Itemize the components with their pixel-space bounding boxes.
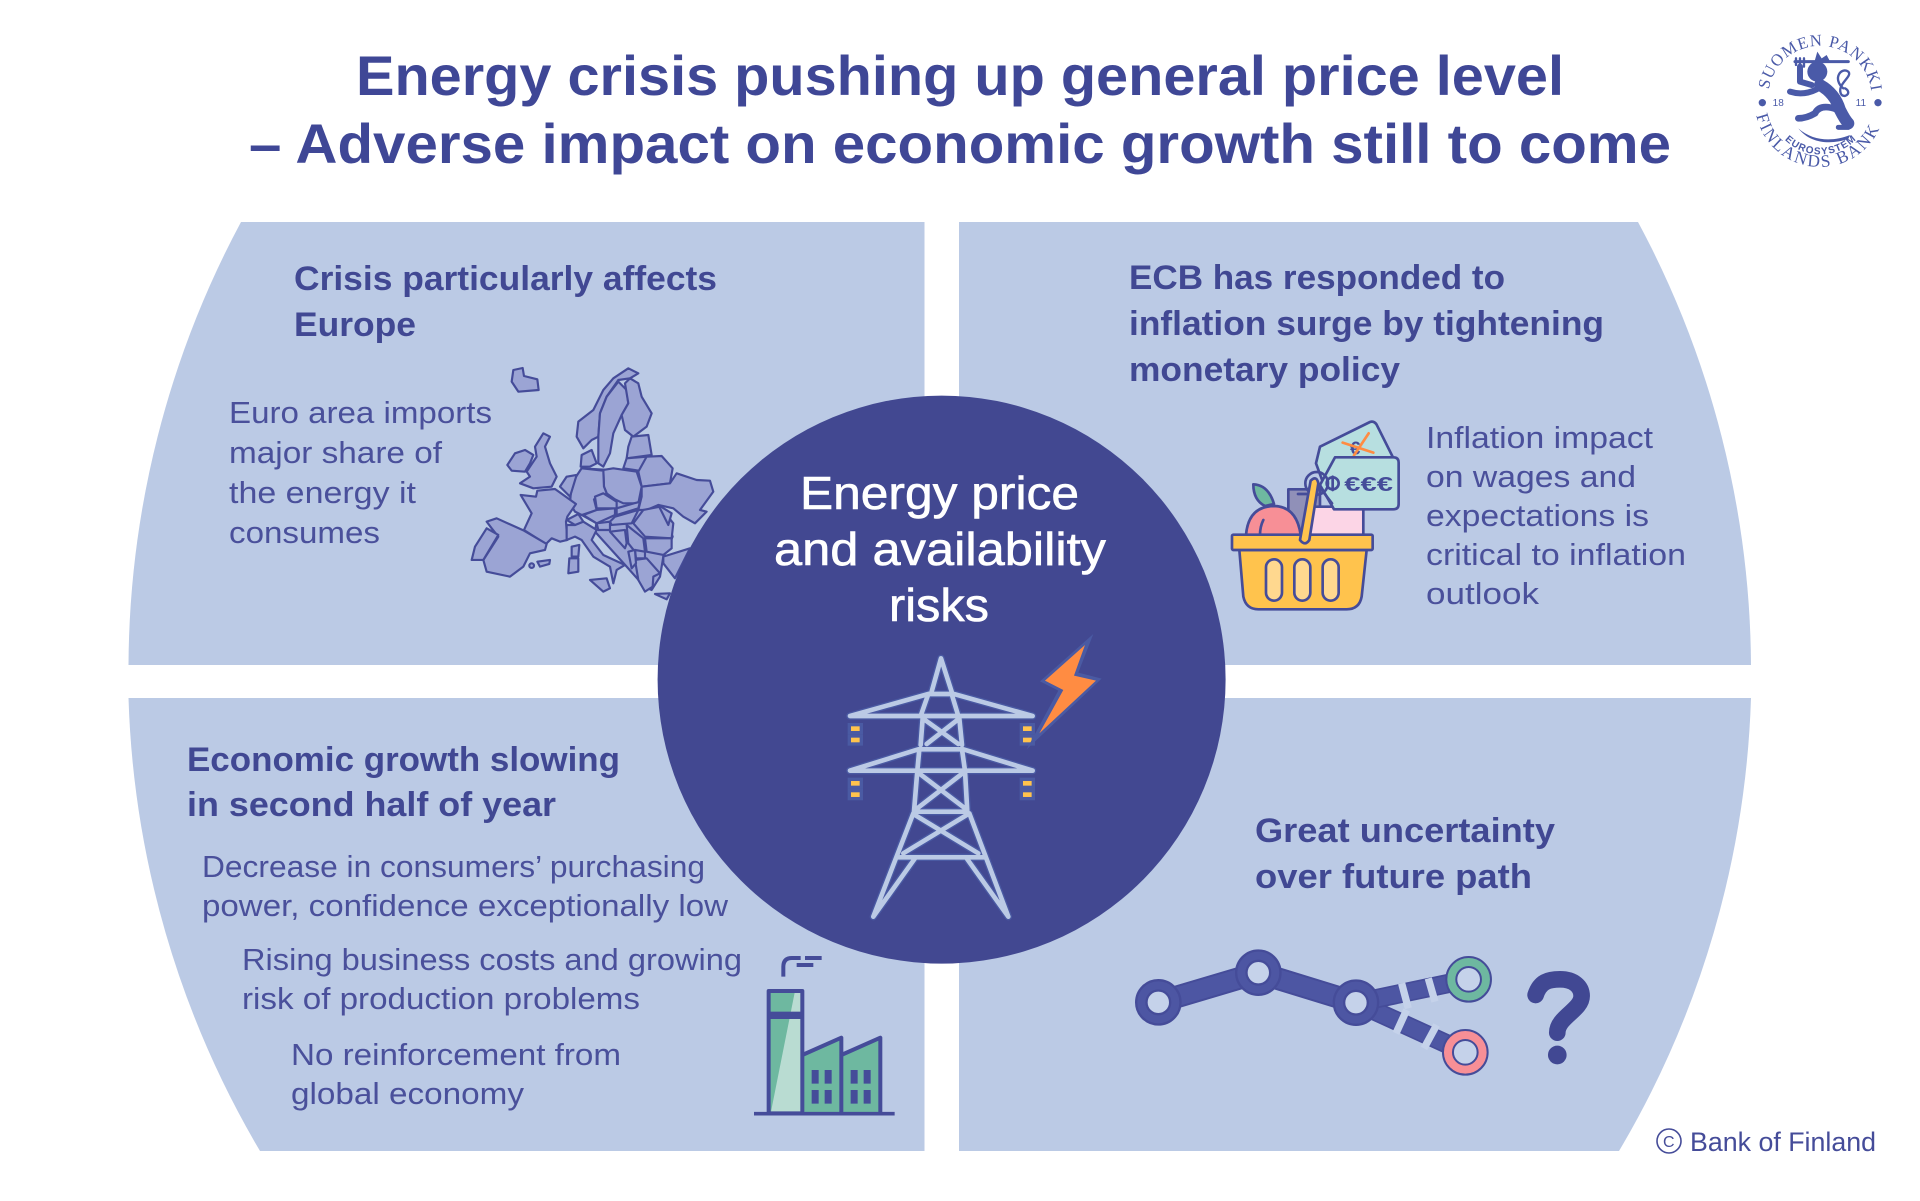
text: business costs: risk of production problems [242, 981, 640, 1016]
heading: uncertainty panel [1255, 812, 1555, 896]
logo: Bank of Finland seal [1756, 34, 1882, 167]
logo: Bank of Finland seal: 11 [1856, 98, 1866, 109]
title: Energy crisis pushing up general price level [356, 44, 1564, 107]
text: global economy: No reinforcement from [291, 1037, 621, 1072]
icon: question mark [1536, 979, 1582, 1064]
icon: shopping basket with price tags [1232, 422, 1399, 609]
center text [774, 467, 1106, 631]
logo: Bank of Finland seal: SUOMEN PANKKI [1758, 34, 1882, 90]
logo: Bank of Finland seal: 18 [1773, 98, 1784, 109]
icon: factory [754, 958, 895, 1114]
logo: Bank of Finland seal: EUROSYSTEM [1785, 135, 1856, 154]
icon: shopping basket with price tags: € [1350, 438, 1361, 459]
center text: risks [889, 579, 989, 631]
center circle: energy price and availability risks [658, 396, 1226, 964]
icon: power pylon [849, 658, 1033, 917]
credit: Bank of Finland [1690, 1127, 1876, 1157]
text: consumers: Decrease in consumers’ purchasing [202, 849, 705, 884]
panel: uncertainty [959, 698, 1876, 1157]
icon: line chart with diverging paths [1141, 956, 1486, 1070]
panel: economic growth [128, 698, 924, 1151]
center text: Energy price [800, 467, 1079, 519]
text: business costs [242, 942, 742, 1016]
icon: shopping basket with price tags: €€€ [1344, 473, 1394, 496]
heading: economic growth panel: in second half of year [187, 786, 556, 824]
credit: C [1663, 1134, 1675, 1151]
heading: ECB panel: monetary policy [1129, 351, 1400, 389]
text: euro area imports [229, 395, 492, 550]
title [249, 44, 1671, 175]
text: inflation impact [1426, 420, 1686, 611]
heading: economic growth panel [187, 741, 620, 824]
text: inflation impact: critical to inflation [1426, 537, 1686, 572]
text: euro area imports: consumes [229, 515, 380, 550]
text: inflation impact: outlook [1426, 576, 1540, 611]
heading: uncertainty panel: Great uncertainty [1255, 812, 1555, 850]
text: consumers [202, 849, 729, 923]
center text: and availability [774, 523, 1106, 575]
heading: ECB panel: inflation surge by tightening [1129, 305, 1604, 343]
heading: uncertainty panel: over future path [1255, 858, 1532, 896]
text: euro area imports: Euro area imports [229, 395, 492, 430]
heading: Europe panel [294, 260, 717, 344]
text: inflation impact: on wages and [1426, 459, 1636, 494]
text: consumers: power, confidence exceptionally low [202, 888, 729, 923]
title: – Adverse impact on economic growth still to come [249, 112, 1671, 175]
text: business costs: Rising business costs and growing [242, 942, 742, 977]
logo: Bank of Finland seal: FINLANDS BANK [1756, 112, 1880, 167]
icon: map of Europe [472, 368, 713, 599]
heading: economic growth panel: Economic growth slowing [187, 741, 620, 779]
text: global economy [291, 1037, 621, 1111]
text: global economy: global economy [291, 1076, 525, 1111]
icon: lightning bolt [1027, 634, 1102, 749]
panel: Europe [128, 222, 924, 665]
panel: ECB [959, 222, 1751, 665]
text: euro area imports: the energy it [229, 475, 416, 510]
text: inflation impact: Inflation impact [1426, 420, 1653, 455]
heading: ECB panel: ECB has responded to [1129, 259, 1505, 297]
heading: ECB panel [1129, 259, 1604, 389]
heading: Europe panel: Crisis particularly affects [294, 260, 717, 298]
text: inflation impact: expectations is [1426, 498, 1649, 533]
text: euro area imports: major share of [229, 435, 442, 470]
heading: Europe panel: Europe [294, 306, 416, 344]
